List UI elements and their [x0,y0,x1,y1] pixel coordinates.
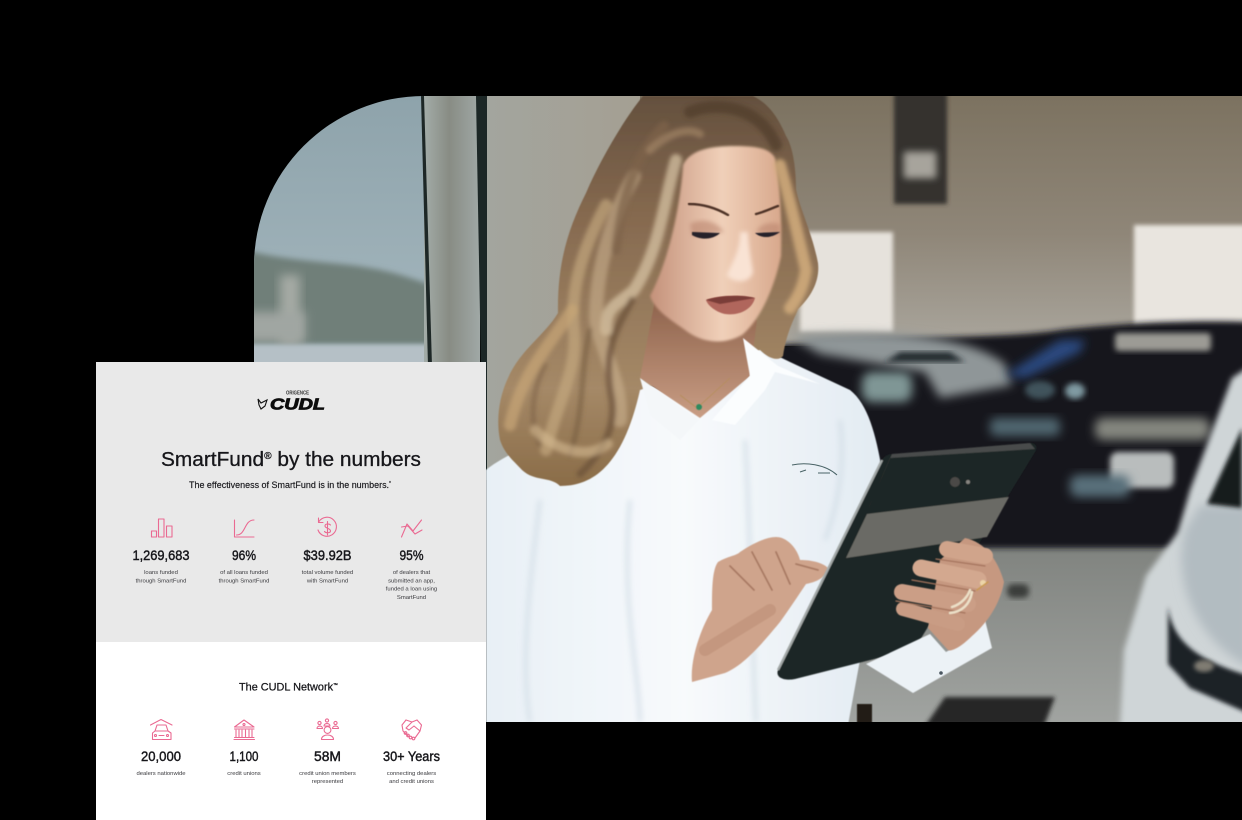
window with blurred landscape [254,96,424,362]
stat: total volume funded: with SmartFund [306,578,348,584]
stat: years connecting dealers [383,720,440,785]
stat: dealers funded a loan [386,520,437,601]
parked dark cars [780,321,1242,548]
heading: The CUDL Network: ™ [333,682,338,688]
stat: dealers funded a loan: funded a loan using [386,586,437,592]
icon: handshake [402,720,422,740]
stat: loans funded: through SmartFund [136,578,186,584]
photo: woman using a tablet in a car showroom [245,92,1242,730]
stat: dealers funded a loan: SmartFund [397,595,426,601]
stat: total volume funded [302,517,353,584]
heading: The CUDL Network: The CUDL Network [239,682,334,694]
panel: CUDL network background [96,642,486,820]
floor mat [925,697,1055,726]
title: by the numbers [272,448,421,471]
stat: credit union members represented: credit union members [299,771,356,777]
woman [486,96,1036,725]
stat: total volume funded: $39.92B [304,548,352,563]
icon: crossing line chart [402,520,422,537]
stat: credit unions: 1,100 [230,749,258,764]
collar and necklace [640,338,814,424]
stat: dealers funded a loan: of dealers that [393,570,431,576]
stat: percent of loans funded [219,520,269,584]
tablet [777,443,1036,680]
hair strands and highlights [510,107,806,474]
stat: dealers funded a loan: 95% [400,548,424,563]
shirt [486,340,883,725]
stat: dealers nationwide [136,720,186,777]
stat: percent of loans funded: through SmartFund [219,578,269,584]
title: ® [264,451,272,462]
icon: bar chart [152,519,172,537]
stat: dealers funded a loan: submitted an app, [388,578,435,584]
stat: years connecting dealers: and credit unions [389,779,434,785]
shirt cuff [866,620,992,693]
stat: loans funded [132,519,190,584]
icon: dollar in circular arrow [318,517,336,536]
stat: years connecting dealers: connecting dealers [387,771,436,777]
stat: loans funded: 1,269,683 [132,548,190,563]
right hand with rings [896,538,1004,650]
logo: Origence CUDL: ORIGENCE [286,390,310,396]
stat: percent of loans funded: 96% [232,548,256,563]
icon: growth curve [234,520,254,537]
left hand and forearm [692,537,828,682]
stat: credit union members represented [299,719,356,785]
showroom floor [848,544,1170,722]
shirt folds [526,420,842,722]
stat: percent of loans funded: of all loans funded [220,570,268,576]
panel: SmartFund stats background [96,362,486,642]
stat: loans funded: loans funded [144,570,178,576]
stat: years connecting dealers: 30+ Years [383,749,440,764]
face [650,146,781,341]
stat: dealers nationwide: 20,000 [141,749,181,764]
stat: credit unions [227,720,261,777]
white car in foreground [1120,366,1242,730]
stat: credit unions: credit unions [227,771,261,777]
window column and frames [421,96,490,480]
subtitle: * [389,481,391,487]
poster on wall [894,92,947,204]
neck and chest [640,300,757,418]
stat: dealers nationwide: dealers nationwide [136,771,186,777]
bright showroom windows [800,225,1242,332]
icon: car under roof [150,720,172,740]
icon: bank building [234,720,254,740]
icon: group of people [317,719,338,740]
logo: Origence CUDL: CUDL [270,396,325,414]
shirt logo [792,464,837,475]
belt [857,704,872,724]
facial features [689,204,780,314]
stat: credit union members represented: 58M [314,749,341,764]
title: SmartFund [161,448,262,471]
logo: Origence CUDL [258,390,325,414]
stat: credit union members represented: represented [312,779,343,785]
showroom back wall [487,96,1242,470]
stat: total volume funded: total volume funded [302,570,353,576]
hair mass [498,96,818,486]
stats card [96,362,486,820]
subtitle: The effectiveness of SmartFund is in the numbers. [189,480,390,490]
